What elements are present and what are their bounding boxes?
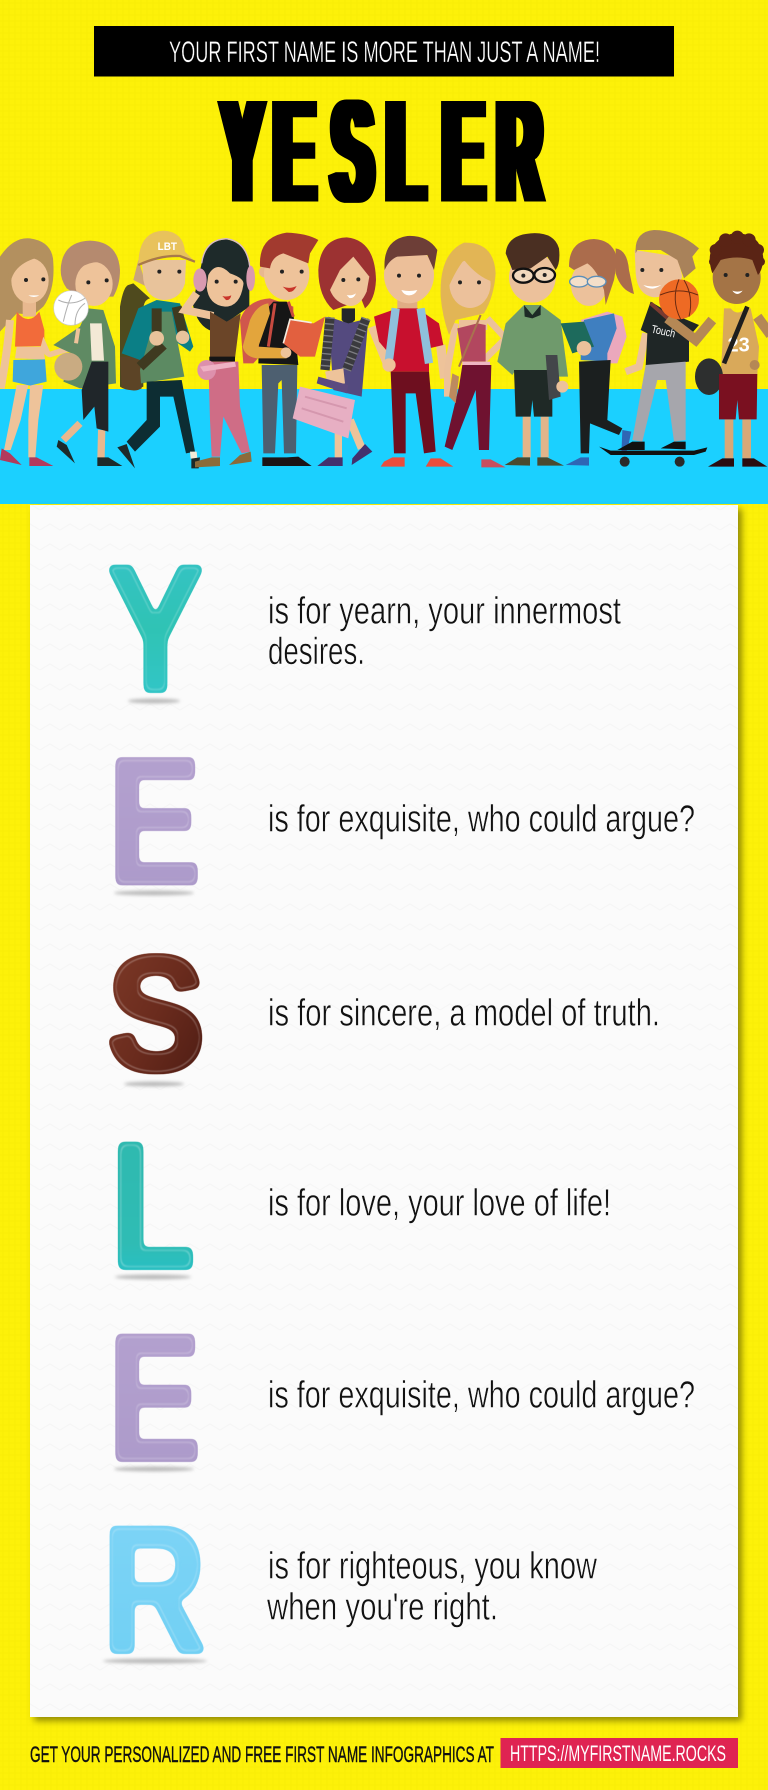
icon: letter E: E: [110, 1303, 198, 1494]
text: R meaning: [266, 1545, 597, 1628]
person 11: skateboarder with basketball: Touch: [650, 324, 676, 340]
text: Y meaning: [268, 590, 621, 673]
shadow under R: [103, 1658, 207, 1664]
shadow under E: [114, 890, 194, 896]
person 12: curly-haired boy in number 23 tank top: 23: [728, 335, 750, 357]
row 5: letter E: [110, 1303, 695, 1494]
person 8: blonde girl: [441, 243, 506, 467]
person 10: girl with ponytail, tablet and pink backpack: [561, 239, 634, 466]
person 11: skateboarder with basketball: [599, 230, 712, 467]
text: R meaning: is for righteous, you know: [268, 1545, 597, 1587]
text: Y meaning: is for yearn, your innermost: [268, 590, 621, 632]
shadow under S: [124, 1082, 184, 1086]
text: R meaning: when you're right.: [266, 1586, 498, 1628]
person 2: girl with volleyball: [53, 241, 122, 466]
person 3: hiker with backpack and cap: LBT: [158, 241, 177, 253]
right half of the crowd: [372, 230, 768, 467]
text: S meaning: is for sincere, a model of truth.: [268, 992, 660, 1034]
illustration: row of twelve students: [0, 230, 768, 468]
icon: letter R: R: [104, 1494, 205, 1686]
icon: letter S: S: [110, 927, 201, 1101]
row 6: letter R: [103, 1494, 597, 1686]
icon: letter L: L: [112, 1110, 192, 1302]
row 4: letter L: [112, 1110, 611, 1302]
person 4: girl with pink headphones: [185, 239, 255, 467]
left half of the crowd: [0, 231, 376, 468]
text: Y meaning: desires.: [268, 631, 365, 673]
person 3: hiker with backpack and cap: [117, 231, 200, 468]
icon: letter Y: Y: [111, 532, 200, 725]
title: YESLER: YESLER: [222, 70, 541, 233]
blue floor band: [0, 389, 768, 504]
person 9: boy with glasses in green sweater: [497, 233, 568, 466]
shadow under E: [114, 1466, 194, 1472]
shadow under L: [115, 1274, 191, 1280]
person 12: curly-haired boy in number 23 tank top: [695, 231, 768, 467]
row 1: letter Y: [111, 532, 621, 725]
shadow under Y: [128, 698, 180, 704]
person 1: girl in orange top: [0, 238, 79, 466]
icon: letter E: E: [110, 726, 198, 918]
person 6: girl with pink bag: [293, 237, 376, 466]
row 2: letter E: [110, 726, 695, 918]
white content card: [30, 505, 738, 1717]
person 5: boy reading a book: [240, 233, 325, 466]
person 7: boy in red tee: [372, 236, 453, 467]
top banner: [94, 26, 674, 76]
text: L meaning: is for love, your love of life!: [268, 1182, 611, 1224]
row 3: letter S: [110, 927, 660, 1101]
